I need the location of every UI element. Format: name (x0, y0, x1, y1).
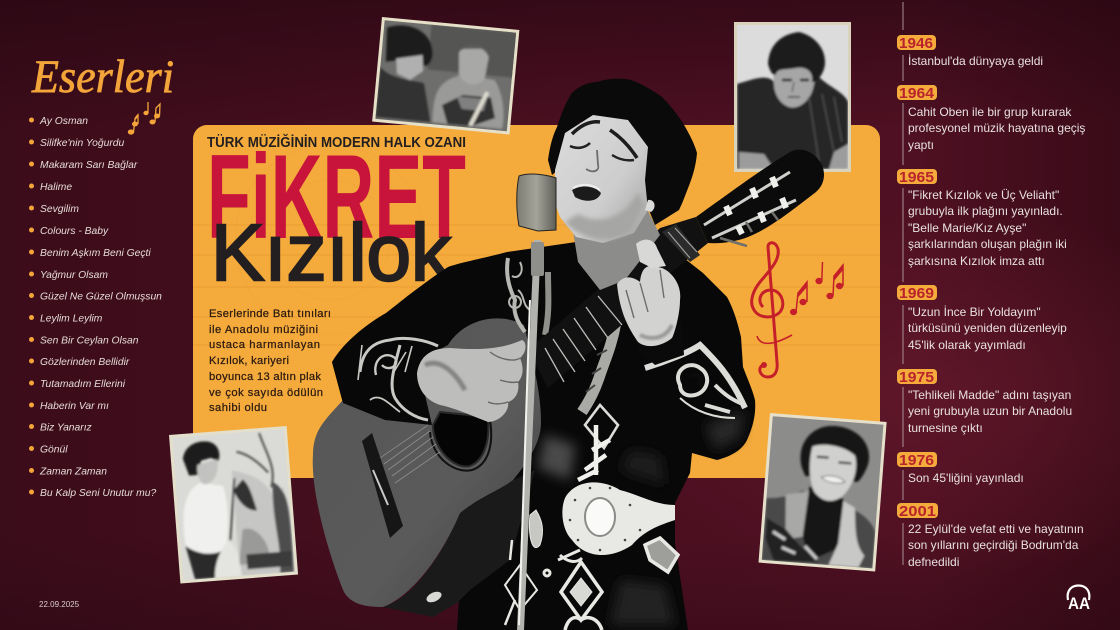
photo: portrait top right (734, 22, 851, 172)
chest embroidery (507, 258, 618, 480)
guitar body (313, 318, 541, 617)
guitar neck (528, 217, 708, 388)
timeline lines (902, 2, 904, 565)
logo: AA: AA (1068, 594, 1090, 613)
text block: description: ve çok sayıda ödülün (209, 387, 323, 399)
head: hair (548, 79, 697, 225)
event 1965: grubuyla ilk plağını yayınladı. (908, 204, 1063, 218)
event 1946: 1946 (899, 35, 933, 52)
title: Kızılok: Kızılok (211, 208, 452, 297)
lower jacket embroidery (505, 510, 678, 630)
icon: orange music notes (128, 102, 160, 135)
lower hand (417, 340, 526, 422)
date: 22.09.2025 (39, 600, 80, 609)
list: songs (29, 116, 162, 499)
photo: two men top centre (372, 17, 519, 135)
event 1969: "Uzun İnce Bir Yoldayım" (908, 305, 1041, 319)
event 1976: Son 45'liğini yayınladı (908, 471, 1024, 485)
list: songs: Ay Osman (39, 116, 88, 127)
event 1965 (897, 169, 1067, 268)
list: songs: Leylim Leylim (40, 314, 103, 324)
list: songs: Silifke'nin Yoğurdu (40, 138, 124, 149)
list: songs: Yağmur Olsam (40, 270, 108, 281)
text block: description: sahibi oldu (209, 402, 267, 414)
event 1965: "Fikret Kızılok ve Üç Veliaht" (908, 188, 1059, 202)
list: songs: Güzel Ne Güzel Olmuşsun (40, 292, 162, 302)
list: songs: Makaram Sarı Bağlar (40, 160, 138, 171)
microphone head (517, 174, 556, 231)
logo: AA (1068, 586, 1090, 613)
left cuff embroidery (358, 338, 438, 420)
event 2001: defnedildi (908, 555, 959, 569)
event 1965: 1965 (899, 169, 934, 186)
timeline (897, 2, 1085, 569)
photo: smiling man with guitar bottom right (758, 413, 887, 572)
event 1975: yeni grubuyla uzun bir Anadolu (908, 404, 1072, 418)
list: songs: Zaman Zaman (39, 466, 107, 478)
event 2001 (897, 503, 1084, 569)
event 1969: 1969 (899, 285, 934, 302)
list: songs: Colours - Baby (40, 226, 109, 237)
icon: treble clef and notes (752, 243, 843, 377)
list: songs: Sen Bir Ceylan Olsan (40, 336, 139, 346)
event 1976 (897, 452, 1024, 485)
event 1946 (897, 35, 1043, 68)
microphone stand (517, 240, 541, 630)
list: songs: Gönül (40, 444, 68, 456)
text block: description: ustaca harmanlayan (209, 339, 320, 351)
belt buckle (562, 482, 675, 555)
left sleeve (332, 322, 440, 425)
heading: Eserleri: Eserleri (31, 51, 174, 103)
list: songs: Sevgilim (40, 204, 79, 215)
text block: description: ile Anadolu müziğini (209, 324, 318, 336)
event 1975: "Tehlikeli Madde" adını taşıyan (908, 388, 1071, 402)
list: songs: Halime (40, 182, 72, 193)
text block: description: boyunca 13 altın plak (209, 371, 321, 383)
list: songs: Bu Kalp Seni Unutur mu? (40, 488, 156, 499)
event 1975: turnesine çıktı (908, 421, 983, 435)
photo: man with saz bottom left (169, 426, 298, 584)
event 1969 (897, 285, 1067, 352)
event 2001: 22 Eylül'de vefat etti ve hayatının (908, 522, 1084, 536)
list: songs: Tutamadım Ellerini (40, 379, 126, 390)
text block: description: Kızılok, kariyeri (209, 355, 289, 367)
event 1969: türküsünü yeniden düzenleyip (908, 321, 1067, 335)
text block: description (209, 308, 331, 414)
guitar headstock (696, 150, 824, 246)
waist shading and lower jacket folds (538, 410, 745, 625)
panel: orange title panel (193, 125, 880, 478)
event 1965: şarkısına Kızılok imza attı (908, 254, 1045, 268)
text block: description: Eserlerinde Batı tınıları (209, 308, 331, 320)
event 1964: profesyonel müzik hayatına geçiş (908, 121, 1085, 135)
title: subtitle: TÜRK MÜZİĞİNİN MODERN HALK OZANI (207, 133, 466, 151)
event 2001: 2001 (899, 503, 936, 520)
event 1964: 1964 (899, 85, 935, 102)
event 1964: Cahit Oben ile bir grup kurarak (908, 105, 1072, 119)
jacket silhouette (332, 230, 755, 630)
microphone clip (531, 242, 544, 276)
figure: singer with guitar and microphone (313, 79, 824, 630)
event 1965: şarkılarından oluşan plağın iki (908, 237, 1067, 251)
event 1964: yaptı (908, 138, 934, 152)
title: FiKRET: FiKRET (207, 130, 466, 264)
strap button (425, 590, 443, 604)
neck and collar of singer (572, 205, 660, 290)
list: songs: Benim Aşkım Beni Geçti (40, 248, 151, 259)
list: songs: Haberin Var mı (40, 401, 109, 412)
list: songs: Gözlerinden Bellidir (40, 357, 130, 368)
event 1946: İstanbul'da dünyaya geldi (908, 54, 1043, 68)
event 1975: 1975 (899, 369, 934, 386)
event 1975 (897, 369, 1072, 435)
event 1965: "Belle Marie/Kız Ayşe" (908, 221, 1026, 235)
event 2001: son yıllarını geçirdiği Bodrum'da (908, 538, 1079, 552)
head: face (555, 115, 655, 243)
list: songs: Biz Yanarız (40, 422, 92, 434)
upper hand (617, 240, 684, 365)
event 1964 (897, 85, 1085, 152)
right sleeve embroidery (645, 345, 745, 418)
event 1969: 45'lik olarak yayımladı (908, 338, 1026, 352)
event 1976: 1976 (899, 452, 934, 469)
